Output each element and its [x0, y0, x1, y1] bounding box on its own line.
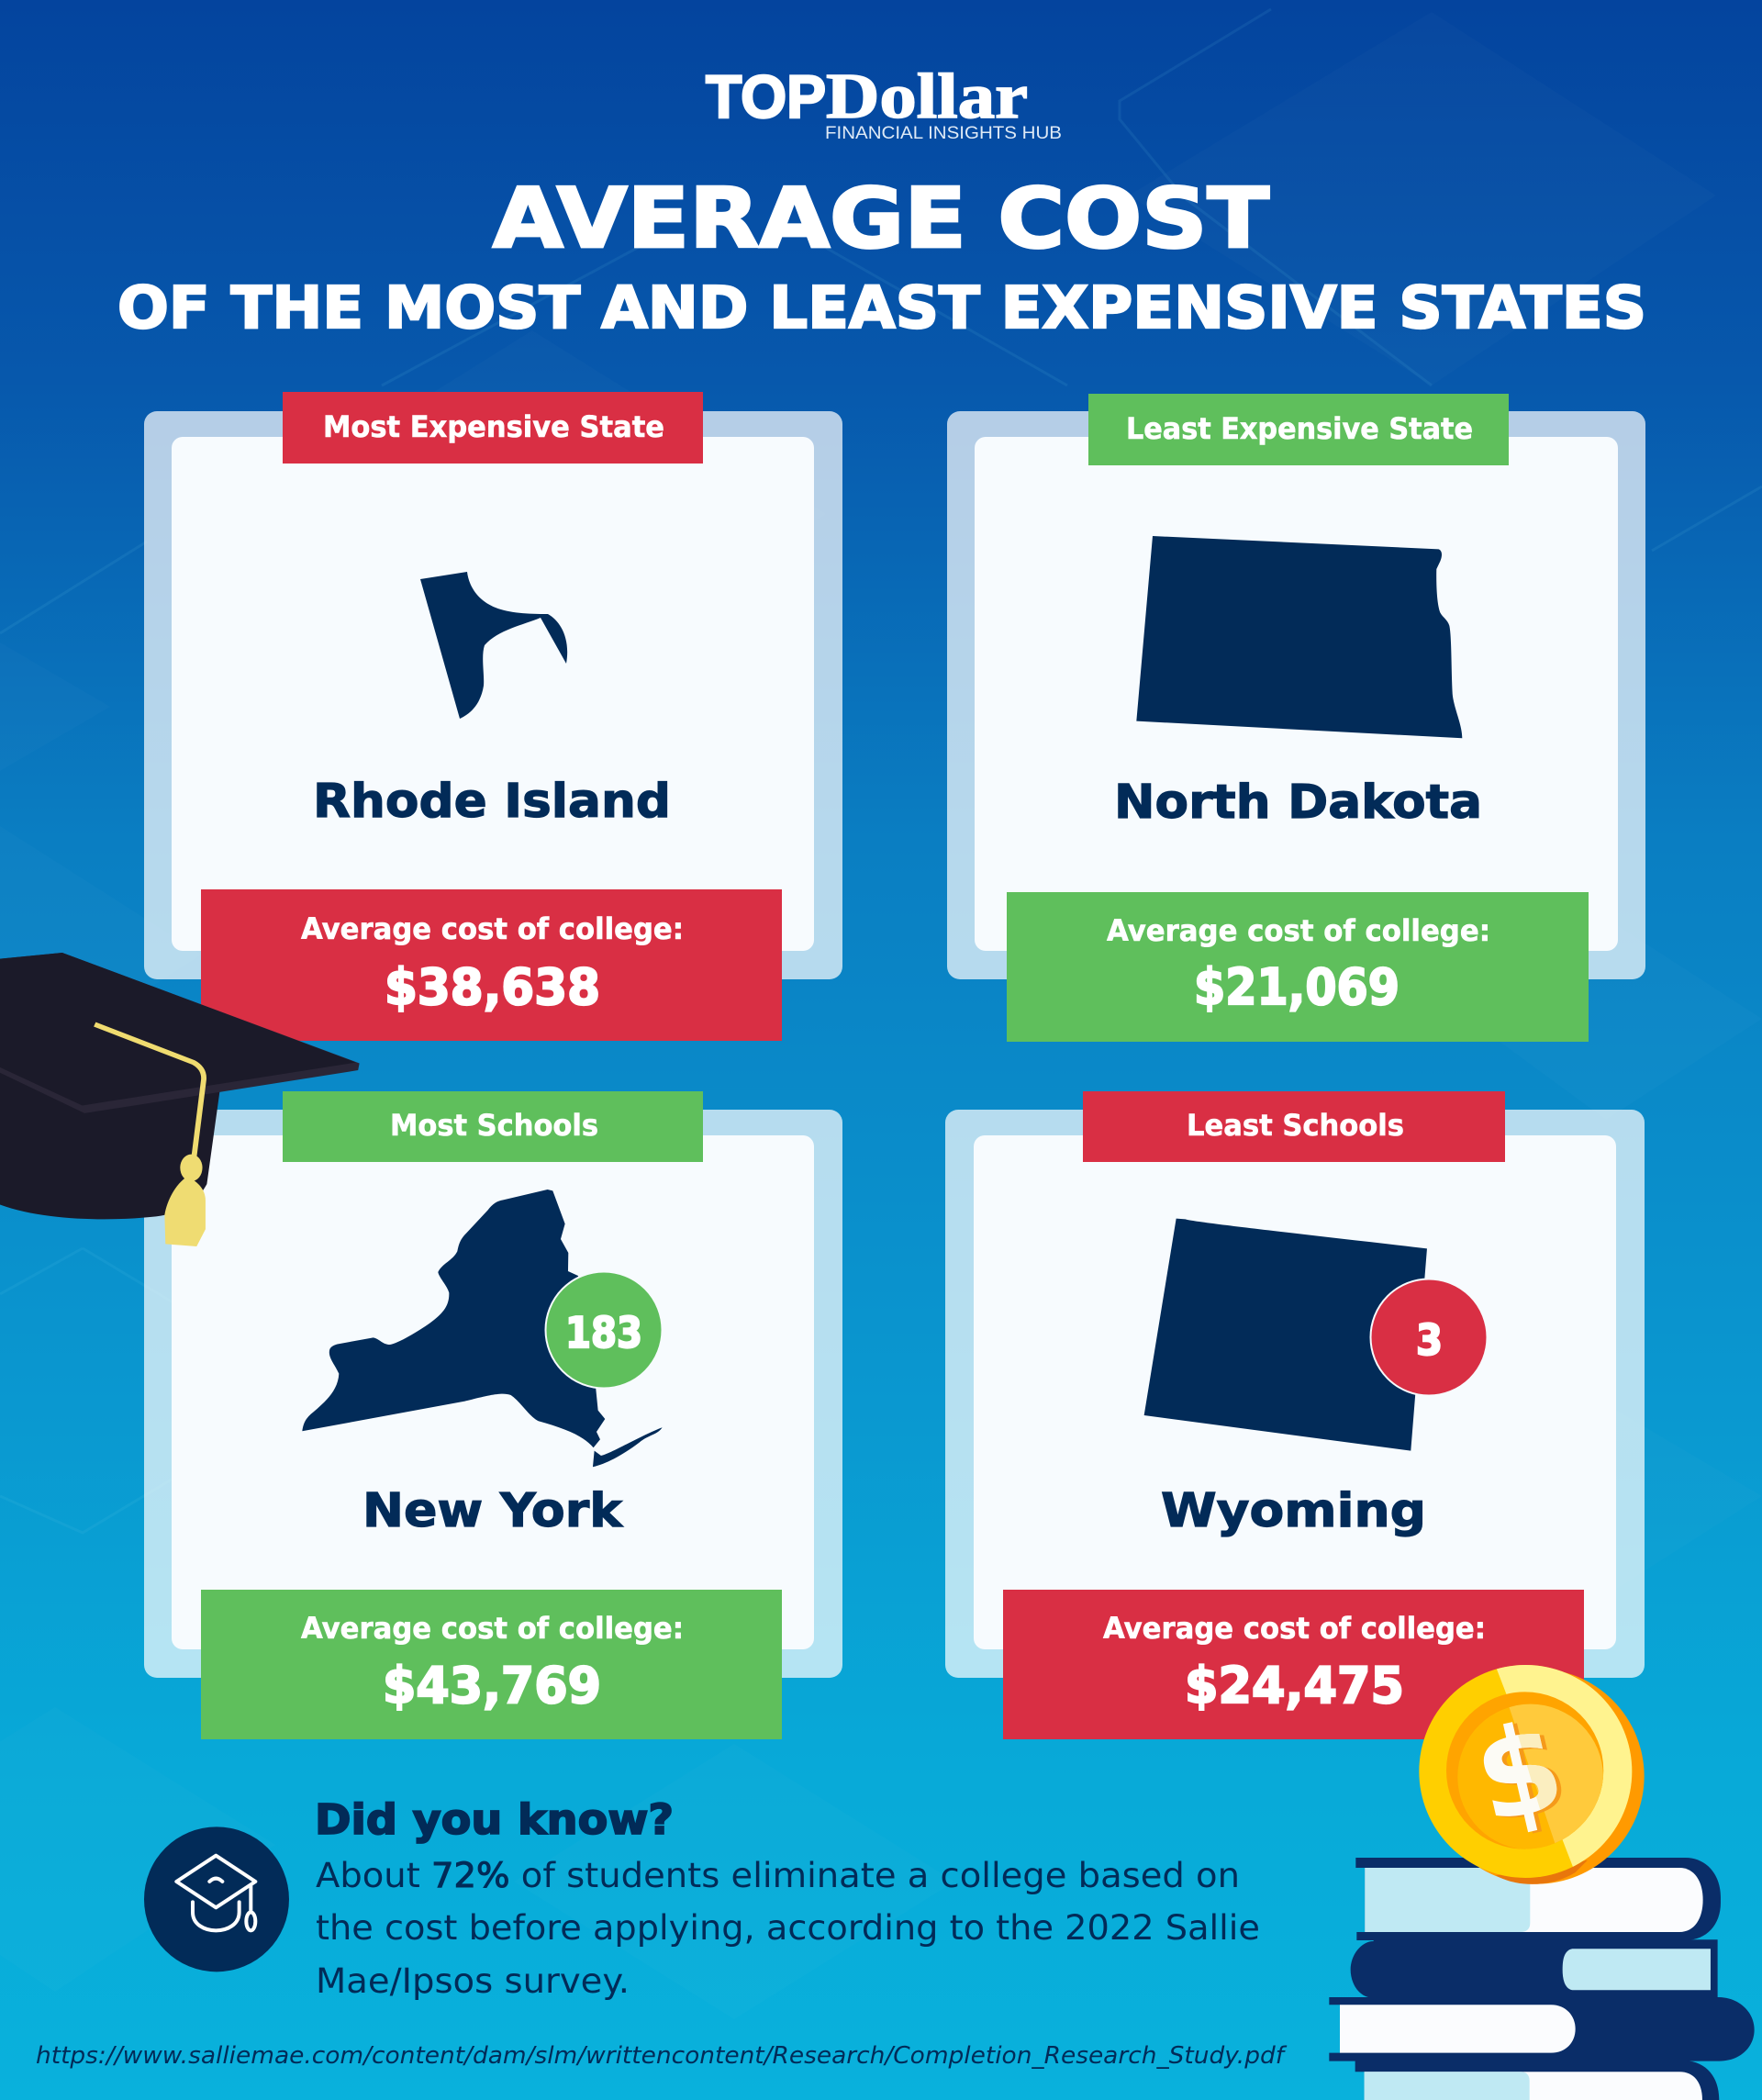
- badge: 3 schools: [1371, 1279, 1487, 1395]
- cost bar: North Dakota: $21,069: [1194, 958, 1400, 1016]
- cost bar: North Dakota: [1007, 892, 1589, 1042]
- heading tab: least schools: [1083, 1091, 1505, 1162]
- icon: cap in circle: [144, 1826, 289, 1972]
- heading tab: least schools: Least Schools: [1187, 1108, 1404, 1143]
- map: North Dakota: [1136, 536, 1462, 738]
- cost bar: New York: Average cost of college:: [301, 1611, 684, 1646]
- state name: Wyoming: Wyoming: [1161, 1484, 1426, 1538]
- icon: stack of books: [1329, 1858, 1755, 2100]
- did you know text: [316, 1856, 1260, 2001]
- did you know text: Mae/Ipsos survey.: [316, 1961, 630, 2001]
- heading tab: most schools: Most Schools: [390, 1108, 598, 1143]
- did you know text: the cost before applying, according to the 2022 Sallie: [316, 1908, 1260, 1948]
- panel: least expensive state: [947, 394, 1645, 1042]
- map: Wyoming: [1144, 1219, 1427, 1451]
- badge: 183 schools: 183: [565, 1308, 642, 1357]
- cost bar: Wyoming: Average cost of college:: [1103, 1611, 1486, 1646]
- panel: most schools: [144, 1091, 842, 1739]
- cost bar: North Dakota: Average cost of college:: [1107, 913, 1490, 948]
- cost bar: Wyoming: $24,475: [1185, 1657, 1404, 1715]
- badge: 183 schools: [545, 1272, 663, 1388]
- heading tab: least expensive state: [1088, 394, 1509, 465]
- heading tab: least expensive state: Least Expensive State: [1126, 411, 1473, 446]
- cost bar: Rhode Island: $38,638: [385, 958, 600, 1016]
- subtitle: OF THE MOST AND LEAST EXPENSIVE STATES: [117, 274, 1646, 341]
- icon: gold coin: $: [1463, 1694, 1576, 1852]
- panel: least schools: [945, 1091, 1645, 1739]
- cost bar: New York: [201, 1590, 782, 1739]
- source url: https://www.salliemae.com/content/dam/slm/writtencontent/Research/Completion_Research_Study.pdf: [36, 2042, 1288, 2070]
- badge: 3 schools: 3: [1416, 1315, 1443, 1365]
- heading tab: most expensive state: Most Expensive State: [323, 409, 664, 444]
- logo: TOP: [706, 62, 826, 130]
- icon: gold coin: $: [1463, 1694, 1576, 1852]
- map: New York: [302, 1190, 663, 1467]
- logo: FINANCIAL INSIGHTS HUB: [825, 124, 1062, 143]
- cost bar: New York: $43,769: [383, 1657, 601, 1715]
- map: Rhode Island: [420, 572, 567, 719]
- heading tab: most expensive state: [283, 392, 703, 464]
- state name: New York: New York: [362, 1484, 623, 1538]
- panel: most expensive state: [144, 392, 842, 1041]
- heading tab: most schools: [283, 1091, 703, 1162]
- did you know text: About 72% of students eliminate a college based on: [316, 1856, 1240, 1895]
- icon: gold coin: $: [1467, 1695, 1580, 1853]
- cost bar: Rhode Island: [201, 889, 782, 1041]
- icon: graduation cap: [0, 953, 360, 1246]
- cost bar: Wyoming: [1003, 1590, 1584, 1739]
- logo: [706, 61, 1062, 143]
- state name: Rhode Island: Rhode Island: [313, 775, 671, 829]
- state name: North Dakota: North Dakota: [1114, 776, 1482, 830]
- did you know heading: Did you know?: [315, 1795, 674, 1844]
- logo: Dollar: [826, 61, 1028, 132]
- cost bar: Rhode Island: Average cost of college:: [301, 911, 684, 946]
- icon: gold coin: [1419, 1665, 1645, 1884]
- title: AVERAGE COST: [493, 171, 1269, 267]
